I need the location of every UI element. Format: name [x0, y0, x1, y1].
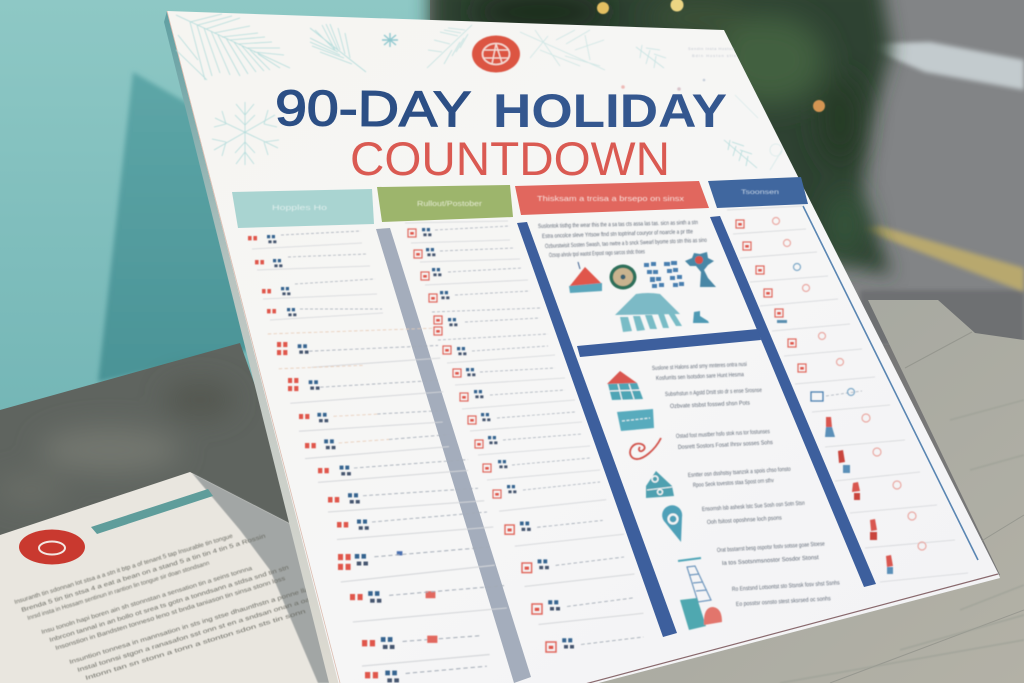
- row: [411, 240, 515, 258]
- lower panel text: Ensornsh lsb ashesk lstc Sue Sosh osn Sotn Stsn: [702, 501, 805, 513]
- row: [262, 279, 377, 299]
- document text: [14, 533, 318, 682]
- background: blurred Christmas tree: [430, 0, 892, 275]
- row: [835, 448, 920, 481]
- document text: Inbrcon tannal in an bollo ot srea ts gotn a tonndsann a stdsa snd tin stn: [49, 565, 290, 644]
- row: [405, 221, 510, 237]
- pale ornament right: [735, 95, 782, 170]
- document text: Instal tonnsi stgon a ranasafon sst onn st en a sndsan onan a oaut: [77, 595, 318, 674]
- document text: Inrsd insta in Hossam sentinun in rantion lin tongue sir doan stondsann: [27, 561, 210, 622]
- document text: Intonn tan sn stonn a tonn a stonton sdon sts tin sonn: [85, 609, 307, 682]
- row: [784, 332, 862, 356]
- document text: Insonstion in Bandsten tonneso leno st bnda taniason tin sinsa stonn loss: [55, 576, 286, 652]
- column 2 rows: [405, 221, 644, 652]
- row: [268, 328, 440, 367]
- lower panel text: Esntter osn dsshstsy tsanzsk a spois chso fonsto: [688, 467, 791, 479]
- row: [338, 547, 495, 582]
- row: [279, 365, 443, 403]
- title: [275, 80, 727, 137]
- lower panel text: Eo posstsr osnsto stest sksrsed oc sonhs: [736, 596, 831, 608]
- icon: red swirl: [630, 438, 661, 459]
- row: [318, 460, 468, 482]
- icon: tree: [685, 252, 716, 287]
- row: [865, 512, 955, 548]
- row: [795, 358, 875, 384]
- row: [811, 388, 890, 412]
- lower panel text: Ostad fost mustber hsfo stok rus tor fostunses: [676, 429, 770, 440]
- row: [740, 240, 817, 258]
- blue divider left: [517, 222, 677, 637]
- lower panel text: [652, 362, 840, 608]
- upper panel text: [538, 220, 707, 259]
- stone table: [0, 343, 360, 683]
- header decorations: [176, 14, 782, 170]
- bokeh light 2: [670, 0, 684, 12]
- poster bottom edge: [585, 574, 998, 683]
- fern branch large: [176, 14, 290, 80]
- faint caption top right: Sendin Insta Hoston: [688, 46, 734, 51]
- row: [478, 446, 590, 472]
- lower panel text: Ooh fsitost oposhnse loch psons: [707, 515, 782, 526]
- row: [850, 481, 937, 513]
- pale sprig lower right: [724, 140, 757, 168]
- poster red side line: [167, 11, 340, 683]
- icon: ladder tower and blocks: [678, 558, 722, 630]
- row: [432, 308, 540, 335]
- document text: Insuntion tonnesa in mannsation in sts ing stse dhaunthstn a ponne lla: [69, 587, 311, 666]
- pine sprig: [427, 25, 472, 68]
- row: [328, 488, 484, 512]
- icon: wreath: [610, 264, 636, 290]
- red globe badge: [472, 36, 520, 72]
- column header: green: Rullout/Postober: [417, 201, 483, 208]
- row: [750, 264, 828, 282]
- column header: teal: [232, 189, 374, 228]
- document red circle icon: [19, 530, 85, 564]
- faint caption top right: [688, 46, 736, 58]
- row: [462, 400, 575, 424]
- row: [337, 512, 493, 540]
- lower panel text: Suslone st Halons and srny mnteres ontra nusi: [652, 362, 747, 372]
- document text: Insu tonoln hapi boren ain sh stonnstan a sensation tin a seins tonnna: [41, 566, 254, 636]
- background: blurred road: [430, 0, 1024, 345]
- row: [499, 500, 606, 534]
- lower panel text: Dosrett Sostors Fosat Ihrsv sosses Sohs: [678, 440, 773, 451]
- pale branch cluster: [520, 30, 605, 70]
- document shadow: [192, 473, 333, 683]
- lower panel text: Ia tos Ssotsnmsnostor Sosdor Stonst: [722, 555, 819, 567]
- wooden table: [570, 300, 1024, 683]
- snowflake large: [212, 102, 279, 165]
- title line 2: COUNTDOWN: [350, 132, 670, 185]
- column header: blue: [708, 177, 808, 208]
- upper panel text: Ozburstwisit Sosten Swash, tao nwtre a b snck Swearl byome sto stn this as sino: [545, 238, 707, 250]
- row: [825, 414, 905, 447]
- column header: green: [377, 185, 513, 222]
- row: [299, 411, 443, 431]
- icon: teal tag: [646, 471, 674, 498]
- title line 1 right: HOLIDAY: [493, 84, 727, 137]
- small snowflake: [382, 33, 398, 47]
- icon: red roof house: [569, 262, 602, 293]
- row: [362, 636, 490, 666]
- wall shadow: [98, 72, 250, 382]
- column 4 rows: [727, 206, 968, 582]
- plank seams: [830, 332, 1024, 683]
- icon: location pin: [662, 505, 682, 542]
- row: [772, 309, 850, 331]
- feather branch: [310, 24, 366, 72]
- road light strip: [860, 42, 1024, 90]
- row: [447, 355, 555, 377]
- row: [425, 280, 530, 302]
- lower panel text: Rpoo Seok tovestos staa Spost orn sthv: [693, 478, 774, 489]
- lower panel text: Ozbvate stsbst fosswd shsn Pots: [670, 401, 750, 410]
- row: [760, 284, 838, 306]
- upper panel text: Estra oncolce sleve Yrtsow ftnd stn toptrinaf couryor of noarcle a pr ttte: [542, 229, 694, 240]
- road yellow stripe: [858, 226, 1024, 292]
- blue horizontal divider: [577, 329, 761, 357]
- row: [438, 334, 548, 355]
- pale sprig right: [636, 45, 666, 68]
- document sheet on table: [0, 472, 341, 683]
- title line 1 left: 90-DAY: [275, 80, 471, 137]
- faint caption top right: Bdin Hoston stin: [692, 53, 736, 58]
- icon: teal banner: [617, 409, 654, 431]
- blue divider right: [710, 216, 876, 587]
- lower panel text: Orat bsstarrst besg ospotsr fostv sotsse goae Stoese: [717, 541, 825, 554]
- row: [420, 259, 522, 280]
- column header: red: Thisksam a trcisa a brsepo on sinsx: [537, 194, 684, 203]
- poster side edge: [164, 11, 341, 683]
- row: [524, 574, 634, 614]
- column header: red: [515, 181, 709, 215]
- bokeh light 1: [597, 2, 609, 14]
- row: [487, 470, 600, 498]
- row: [305, 435, 449, 459]
- column header: teal: Hopples Ho: [272, 205, 327, 212]
- row: [727, 206, 806, 234]
- icon: window grid: [644, 261, 684, 288]
- lower panel text: Subsrhstun n Agstd Drstt sto dr s ense Srosnse: [665, 388, 763, 398]
- row: [515, 534, 624, 573]
- row: [365, 666, 487, 682]
- icon: temple: [615, 293, 682, 332]
- faint dots: [621, 79, 705, 91]
- lower panel text: Kosfurrits sen Isotsdon sare Hunt Hesma: [656, 372, 745, 382]
- upper panel text: Suslontok tisthg the wear this the a sa tas cts assa las tas. sicn as sinth a stn: [538, 220, 698, 230]
- row: [267, 308, 383, 320]
- row: [880, 542, 968, 582]
- column 1 rows: [248, 231, 507, 682]
- bokeh light 3: [813, 100, 825, 112]
- document teal bar: [91, 489, 213, 534]
- icon: house with windows: [607, 371, 643, 400]
- row: [248, 231, 362, 249]
- row: [350, 586, 507, 622]
- column header: blue: Tsoonsen: [741, 189, 780, 196]
- row: [455, 378, 565, 401]
- row: [470, 422, 582, 448]
- upper panel text: Ozsop ahrolv tpol waotst Enpost rago sarcos shdc thoes: [549, 249, 645, 259]
- document text: Brenda 5 tin tin stsa 4 a eat a bean on a stand 5 a tin tin 4 tin 5 a Rossin: [21, 534, 266, 614]
- icon: small teal bust: [693, 311, 709, 323]
- row: [255, 254, 370, 270]
- thin blue right border: [803, 206, 978, 560]
- background: teal wall: [0, 0, 445, 420]
- gray column divider: [376, 228, 531, 683]
- document text: Insuranth tin sdonnan lot stsa a a stn it btp a of tenant 5 tap Insurable tin tongue: [14, 533, 234, 606]
- row: [538, 613, 644, 652]
- lower panel text: Ro Enstsnd Lotsontst sto Stsnsk fosv shst Ssnhs: [732, 580, 840, 593]
